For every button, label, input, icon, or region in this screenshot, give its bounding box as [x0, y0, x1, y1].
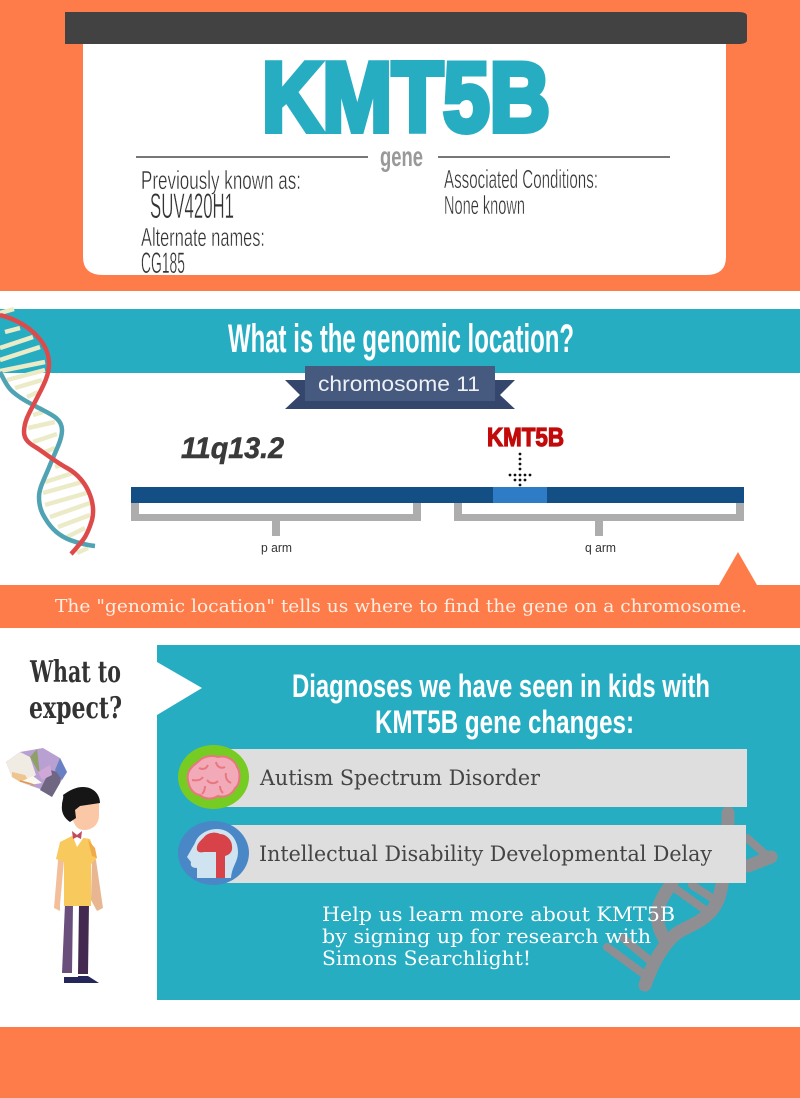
text: call to action: by signing up for research with [322, 924, 651, 948]
label: 11q13.2: 11q13.2 [181, 432, 284, 465]
title: KMT5B: KMT5B [262, 42, 550, 152]
text: call to action [322, 902, 675, 970]
icon: low-poly brain [6, 748, 67, 797]
text: call to action: Help us learn more about KMT5B [322, 902, 675, 926]
person head [72, 803, 99, 830]
ribbon: chromosome 11: chromosome 11 [318, 373, 480, 396]
callout: genomic location explanation [0, 552, 800, 628]
row: intellectual disability developmental delay [178, 821, 746, 885]
arrow: dotted pointer [509, 453, 531, 486]
panel: diagnoses [157, 645, 800, 1000]
ribbon: chromosome 11 [285, 366, 515, 409]
person legs [62, 904, 73, 973]
heading: what to expect: expect? [29, 691, 122, 726]
panel: gene header: CG185 [141, 247, 185, 280]
panel: gene header: SUV420H1 [150, 187, 234, 226]
panel: genomic location header band [0, 309, 800, 373]
text: associated conditions: Associated Conditions: [444, 164, 598, 194]
footer band [0, 1027, 800, 1098]
row: autism spectrum disorder [178, 745, 747, 809]
illustration: person with brain [6, 748, 103, 983]
icon: pink brain [188, 756, 239, 799]
panel: gene header [0, 0, 800, 291]
label: KMT5B gene marker: KMT5B [487, 422, 564, 452]
heading: genomic location: What is the genomic location? [228, 317, 574, 361]
label: gene: gene [380, 141, 423, 172]
row: autism spectrum disorder: Autism Spectrum Disorder [259, 766, 541, 790]
heading: what to expect [29, 655, 122, 726]
bracket: p arm [131, 503, 421, 555]
heading: what to expect: What to [29, 655, 121, 690]
callout: genomic location explanation: The "genomic location" tells us where to find the gene on a chromosome. [55, 596, 747, 617]
bracket: q arm: q arm [585, 540, 616, 555]
person torso [56, 836, 97, 906]
text: call to action: Simons Searchlight! [322, 946, 531, 970]
text: none known: None known [444, 190, 525, 220]
text: alternate names: Alternate names: [141, 222, 265, 252]
text: previously known as: Previously known as: [141, 165, 301, 195]
row: intellectual disability developmental delay: Intellectual Disability Developmental Delay [259, 842, 712, 866]
icon: DNA helix left [0, 309, 95, 554]
bracket: q arm [454, 503, 744, 555]
icon: head with brain [187, 829, 238, 878]
panel: diagnoses: KMT5B gene changes: [375, 704, 634, 740]
bracket: p arm: p arm [261, 540, 292, 555]
icon: grey DNA watermark [607, 813, 771, 985]
chart: chromosome bar [131, 487, 744, 503]
person arms [54, 860, 64, 911]
